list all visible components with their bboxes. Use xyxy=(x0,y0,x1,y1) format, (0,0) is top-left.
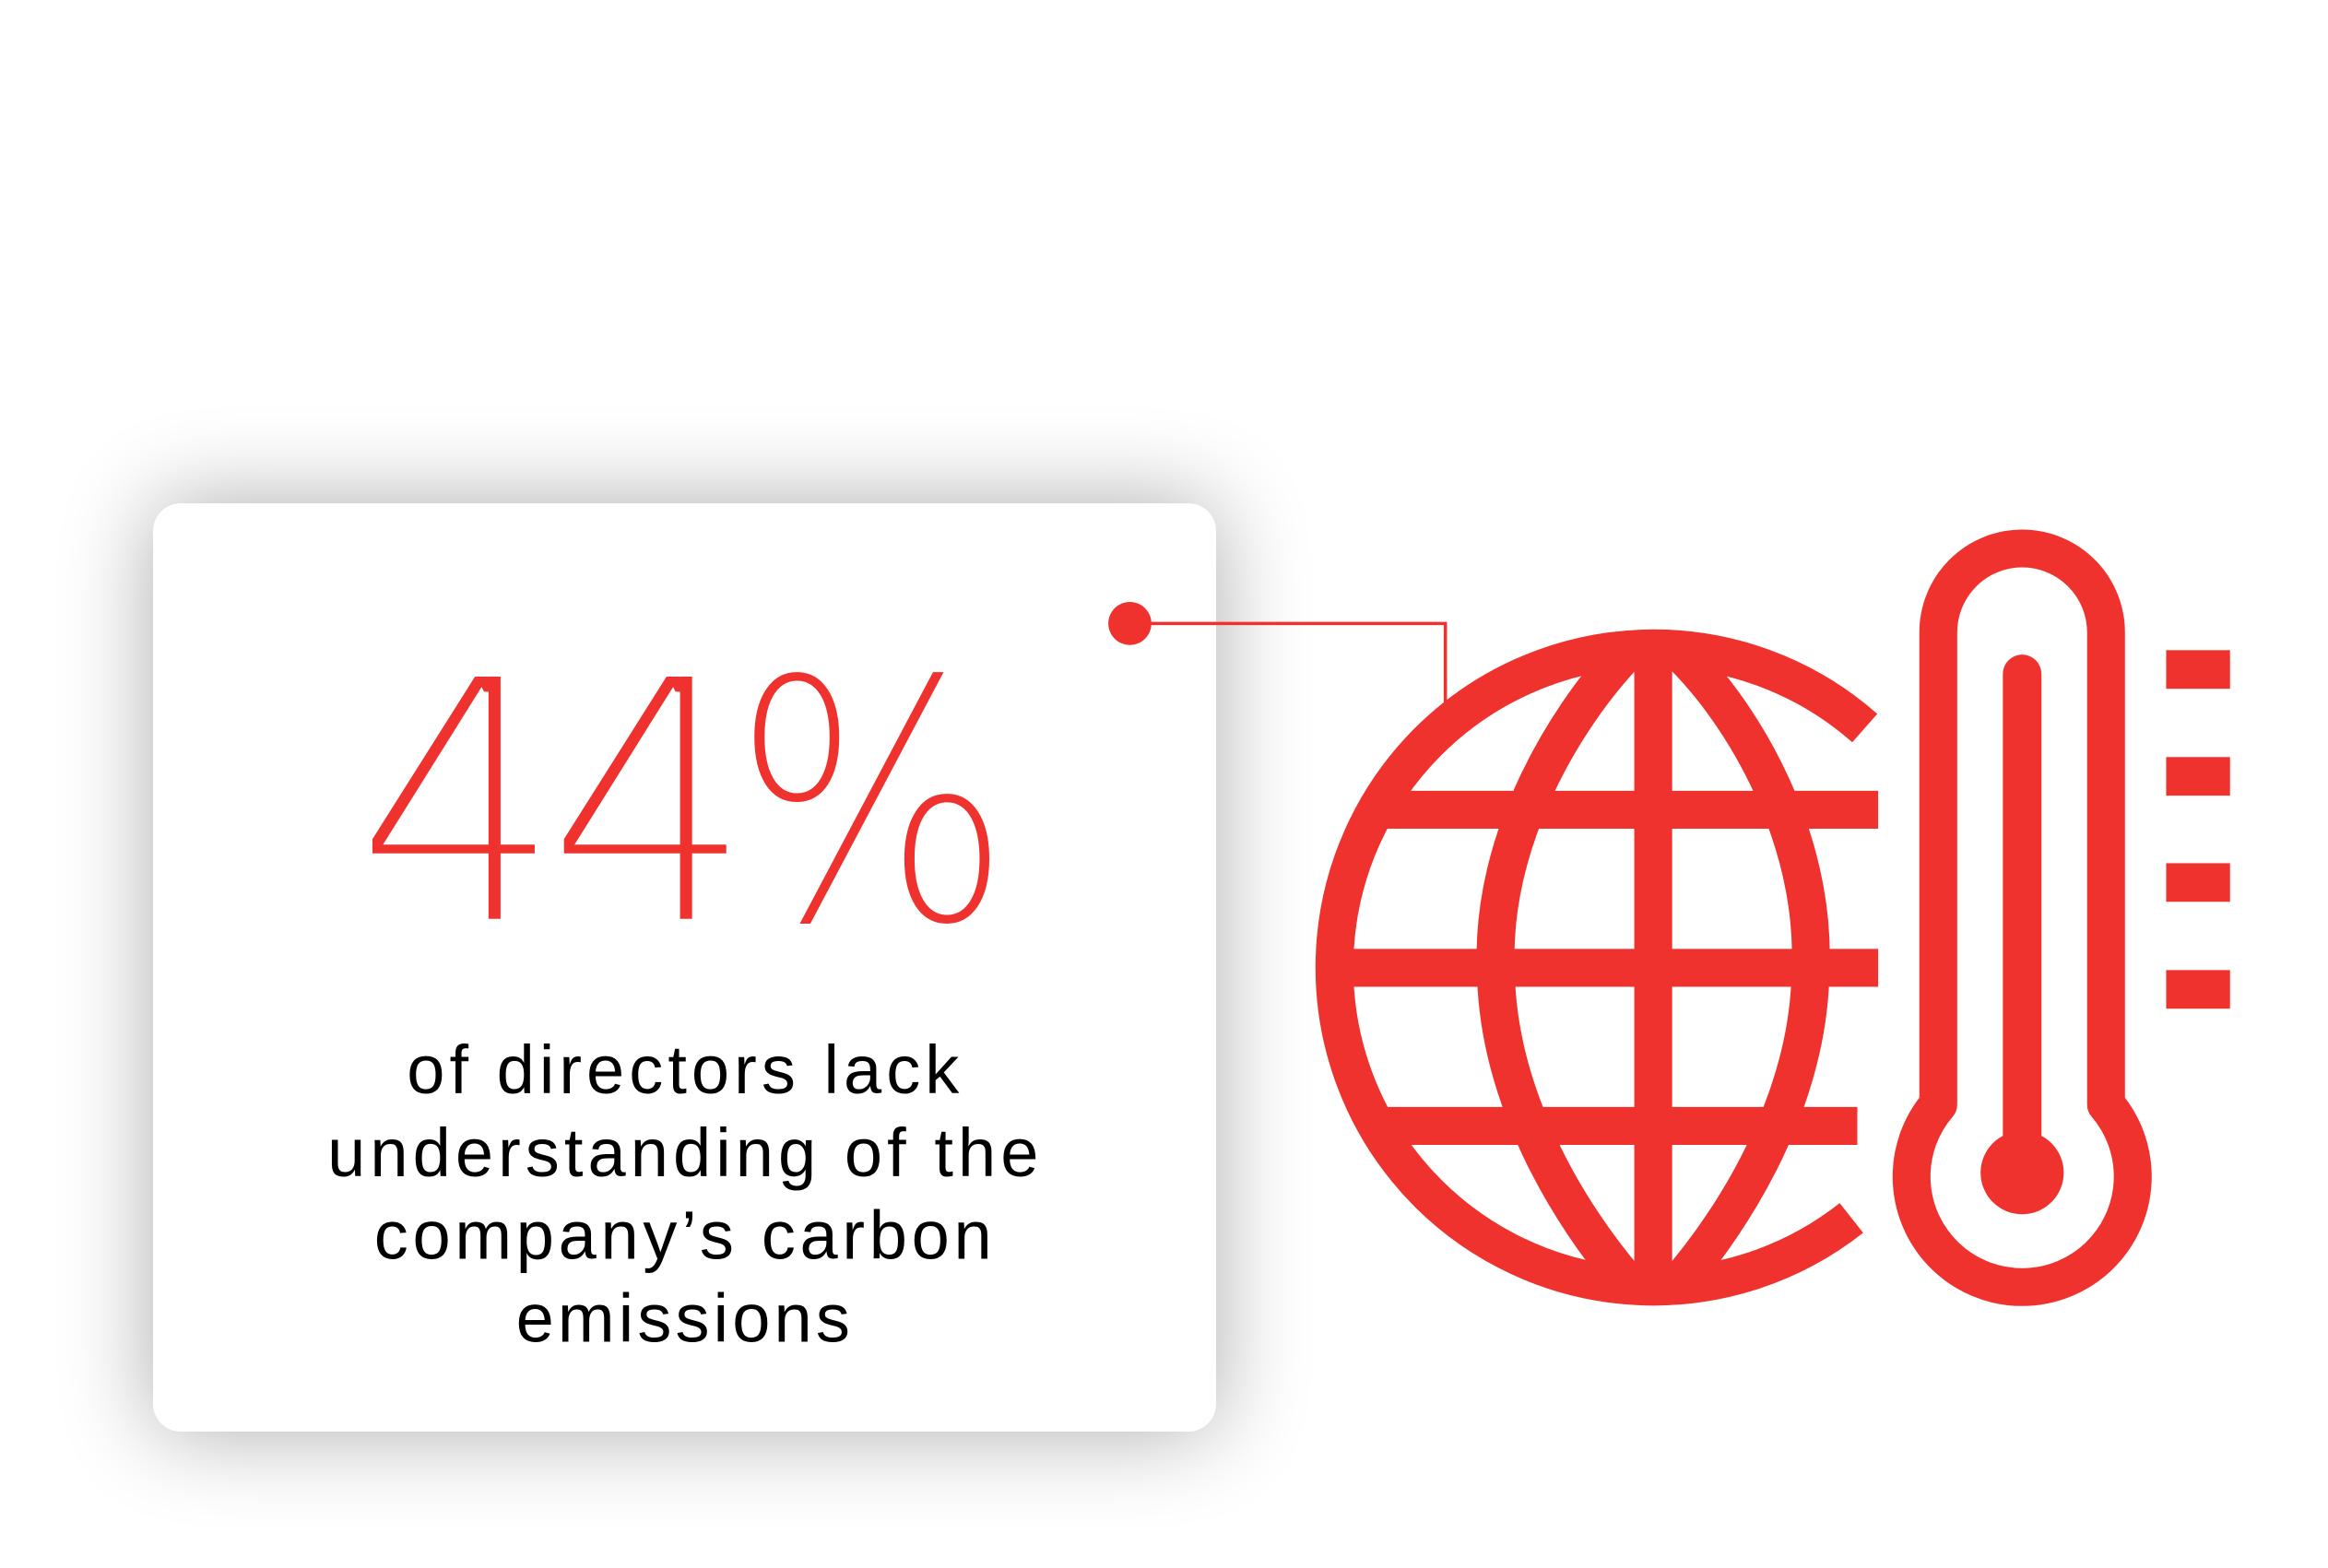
statistic: 44%: 4 xyxy=(354,607,563,1002)
connector line with dot xyxy=(1108,602,1446,707)
description text: understanding of the xyxy=(327,1114,1038,1191)
panel: statistic card xyxy=(153,503,1216,1432)
statistic: 44%: % xyxy=(730,607,1013,1001)
icon: thermometer xyxy=(1911,548,2133,1287)
description text: emissions xyxy=(516,1280,850,1357)
statistic: 44%: 4 xyxy=(546,607,755,1002)
description text: of directors lack xyxy=(407,1032,960,1108)
icon: globe xyxy=(1333,638,1878,1299)
icon: temperature scale ticks xyxy=(2166,650,2230,1008)
description text: company’s carbon xyxy=(374,1197,992,1274)
description text xyxy=(327,1032,1038,1357)
statistic: 44% xyxy=(354,607,1013,1002)
